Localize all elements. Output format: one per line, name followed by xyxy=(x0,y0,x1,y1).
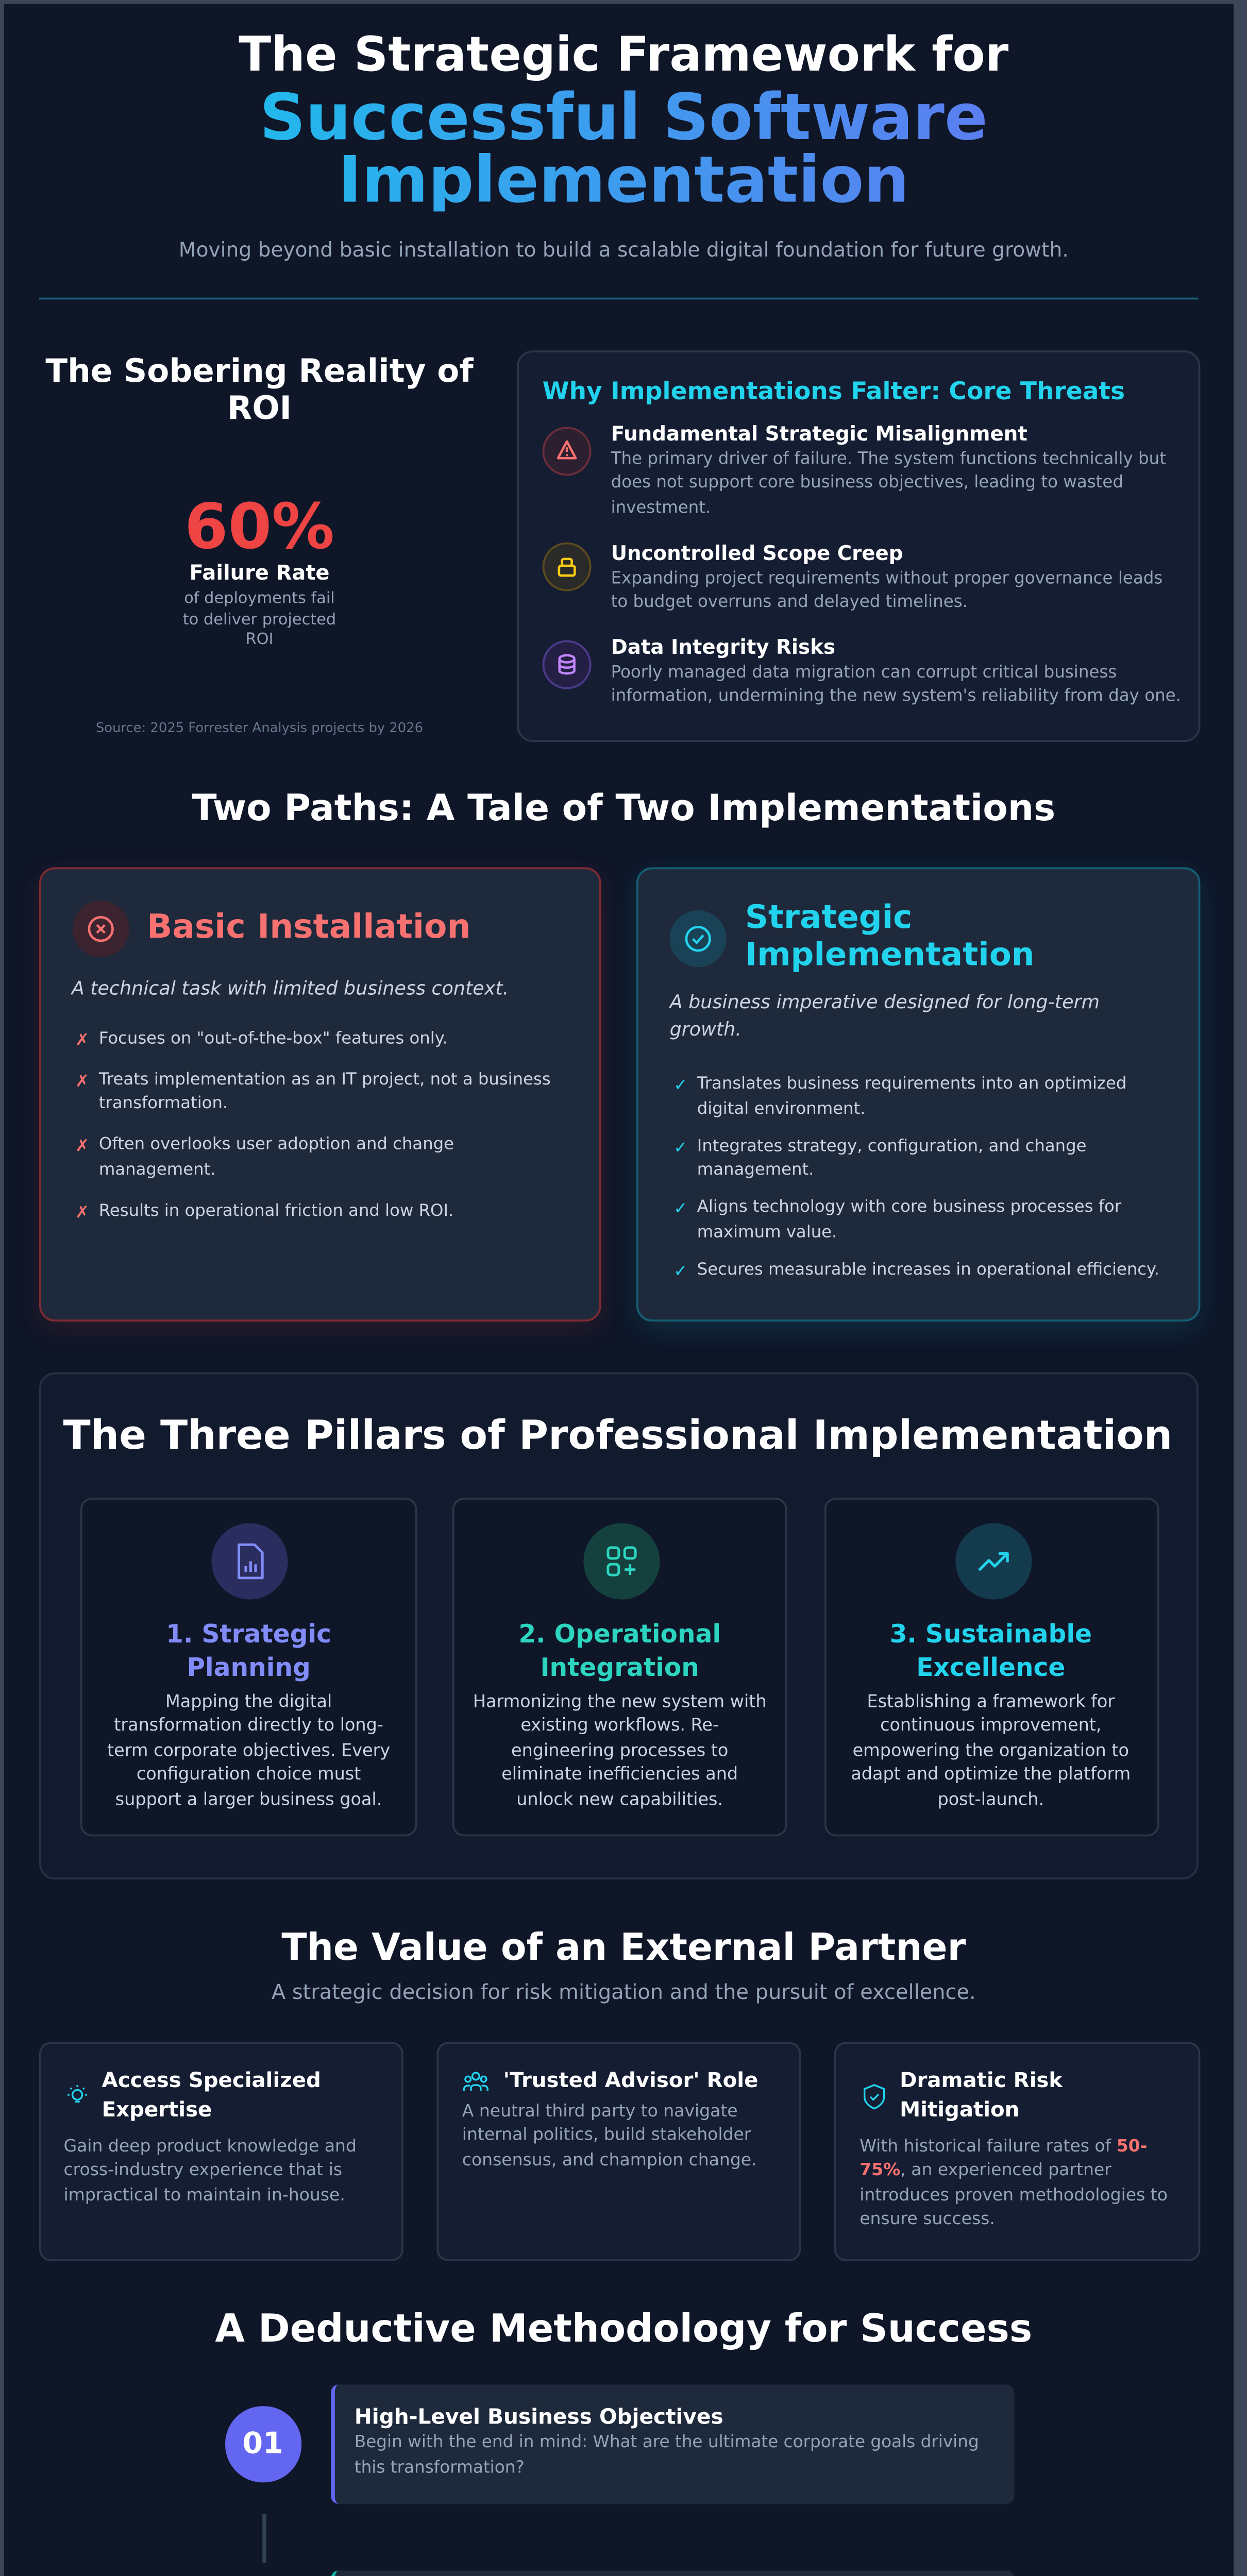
pillar 1 text: Planning xyxy=(187,1653,311,1683)
list: basic bullets xyxy=(75,1029,551,1223)
heading: core threats: Why Implementations Falter: Core Threats xyxy=(543,375,1125,404)
heading: deductive methodology: A Deductive Methodology for Success xyxy=(215,2306,1032,2351)
step 1 xyxy=(225,2384,1014,2504)
list: basic bullets: Results in operational friction and low ROI. xyxy=(99,1201,453,1221)
pillar 3 text: Excellence xyxy=(916,1653,1065,1683)
icon: apps xyxy=(582,1522,659,1599)
list: basic bullets: ✗ xyxy=(75,1138,89,1157)
heading: two paths: Two Paths: A Tale of Two Implementations xyxy=(192,789,1055,830)
stat label: Failure Rate xyxy=(189,561,330,584)
threat 3 text: Poorly managed data migration can corrupt critical business information, undermining the new system's reliability from day one. xyxy=(611,663,1181,707)
pillar 1 text xyxy=(107,1620,390,1811)
threat 2 text: Expanding project requirements without proper governance leads to budget overruns and delayed timelines. xyxy=(611,569,1162,613)
pillar 1 text: Mapping the digital transformation directly to long-term corporate objectives. Every configuration choice must support a larger business goal. xyxy=(107,1692,390,1811)
threat 1 text: The primary driver of failure. The system functions technically but does not support core business objectives, leading to wasted investment. xyxy=(611,449,1166,518)
icon: shield xyxy=(862,2082,887,2109)
text: specialized expertise: Gain deep product knowledge and cross-industry experience that is impractical to maintain in-house. xyxy=(64,2137,357,2206)
card: risk mitigation xyxy=(834,2041,1200,2260)
heading: sobering reality: The Sobering Reality of xyxy=(45,352,474,389)
heading: external partner: The Value of an External Partner xyxy=(281,1926,966,1970)
title: Implementation xyxy=(338,143,909,217)
threat 3 xyxy=(542,637,1181,707)
threat 3 text: Data Integrity Risks xyxy=(611,637,835,659)
step 2 box xyxy=(330,2570,1014,2576)
pillar 3 text: 3. Sustainable xyxy=(890,1620,1092,1650)
pillar 2 text: Harmonizing the new system with existing workflows. Re-engineering processes to eliminate inefficiencies and unlock new capabilities. xyxy=(473,1692,767,1811)
list: basic bullets: Often overlooks user adoption and change management. xyxy=(99,1136,454,1180)
text: trusted advisor: 'Trusted Advisor' Role xyxy=(503,2069,758,2092)
list: basic bullets: Focuses on "out-of-the-box" features only. xyxy=(99,1029,448,1048)
text: trusted advisor: A neutral third party to navigate internal politics, build stakeholder consensus, and champion change. xyxy=(462,2102,757,2170)
heading: sobering reality xyxy=(45,352,474,427)
step 1 box: High-Level Business Objectives xyxy=(355,2404,723,2430)
pillar 3 text xyxy=(851,1620,1131,1811)
stat description: to deliver projected xyxy=(183,610,336,628)
text: risk mitigation xyxy=(860,2066,1173,2233)
list: basic bullets: Treats implementation as an IT project, not a business transformation. xyxy=(99,1070,551,1114)
icon: trend up xyxy=(954,1522,1031,1599)
icon: warning xyxy=(543,426,592,475)
step 1 box xyxy=(330,2384,1014,2504)
threat 1 xyxy=(542,424,1166,518)
text: risk mitigation: With historical failure rates of 50-75%, an experienced partner introduces proven methodologies to ensure success. xyxy=(860,2137,1168,2230)
text: specialized expertise xyxy=(64,2069,357,2206)
list: strategic bullets: Translates business requirements into an optimized digital environment. xyxy=(697,1075,1126,1119)
pillar 2 text: Integration xyxy=(540,1653,699,1683)
threat 2 text xyxy=(611,543,1162,613)
icon: bulb xyxy=(68,2085,88,2103)
pillar 3 xyxy=(823,1497,1158,1836)
subtitle: Moving beyond basic installation to build a scalable digital foundation for future growth. xyxy=(179,239,1069,262)
panel: strategic implementation xyxy=(636,867,1200,1320)
heading: three pillars: The Three Pillars of Professional Implementation xyxy=(63,1411,1172,1458)
subheading: external partner: A strategic decision for risk mitigation and the pursuit of excellence. xyxy=(272,1981,976,2005)
card: specialized expertise xyxy=(38,2041,402,2260)
list: strategic bullets: Secures measurable increases in operational efficiency. xyxy=(697,1260,1159,1279)
pillar 1 xyxy=(80,1497,416,1836)
pillar 3 text: Establishing a framework for continuous improvement, empowering the organization to adapt and optimize the platform post-launch. xyxy=(851,1692,1131,1811)
stat description xyxy=(183,589,336,648)
panel: three pillars xyxy=(38,1371,1199,1879)
panel: core threats xyxy=(517,349,1200,741)
pillar 2 xyxy=(451,1497,787,1836)
source: Source: 2025 Forrester Analysis projects by 2026 xyxy=(96,719,423,735)
stat: 60%: 60% xyxy=(184,489,334,564)
threat 1 text: Fundamental Strategic Misalignment xyxy=(611,424,1027,445)
stat description: of deployments fail xyxy=(184,589,335,607)
title: strategic implementation: Implementation xyxy=(745,935,1034,972)
badge 01: 01 xyxy=(242,2426,283,2461)
icon: check circle xyxy=(670,909,727,966)
icon: report xyxy=(211,1522,288,1599)
list: basic bullets: ✗ xyxy=(75,1031,89,1050)
heading: sobering reality: ROI xyxy=(227,389,292,427)
title: strategic implementation: Strategic xyxy=(745,897,912,935)
icon: x circle xyxy=(72,900,128,956)
card: trusted advisor xyxy=(436,2041,800,2260)
list: strategic bullets: Aligns technology with core business processes for maximum value. xyxy=(697,1198,1121,1242)
title: Successful Software xyxy=(260,80,988,155)
step 1 box: Begin with the end in mind: What are the ultimate corporate goals driving this transformation? xyxy=(355,2433,979,2478)
subtitle italic: A technical task with limited business context. xyxy=(72,978,509,999)
subtitle italic: A business imperative designed for long-term growth. xyxy=(670,992,1100,1042)
list: basic bullets: ✗ xyxy=(75,1072,89,1091)
list: strategic bullets xyxy=(673,1075,1159,1281)
title xyxy=(239,25,1008,217)
stat description: ROI xyxy=(245,631,274,648)
pillar 1 text: 1. Strategic xyxy=(166,1620,331,1650)
list: strategic bullets: ✓ xyxy=(673,1200,687,1219)
connector lines xyxy=(261,2513,265,2562)
list: basic bullets: ✗ xyxy=(75,1203,89,1223)
text: trusted advisor xyxy=(462,2066,779,2173)
title: The Strategic Framework for xyxy=(239,25,1008,82)
step 2 xyxy=(225,2570,1014,2576)
panel: ROI xyxy=(45,352,474,735)
text: risk mitigation: Dramatic Risk Mitigation xyxy=(900,2069,1063,2121)
list: strategic bullets: ✓ xyxy=(673,1139,687,1158)
threat 2 xyxy=(542,542,1162,613)
title: basic installation: Basic Installation xyxy=(147,907,470,946)
icon: stack xyxy=(543,541,592,590)
pillar 2 text: 2. Operational xyxy=(518,1620,721,1650)
list: strategic bullets: ✓ xyxy=(673,1077,687,1096)
list: strategic bullets: ✓ xyxy=(673,1262,687,1281)
pillar 2 text xyxy=(473,1620,767,1811)
text: specialized expertise: Access Specialized Expertise xyxy=(102,2069,321,2121)
badge 01 xyxy=(225,2406,300,2481)
icon: people xyxy=(463,2072,488,2091)
threat 2 text: Uncontrolled Scope Creep xyxy=(611,543,903,565)
list: strategic bullets: Integrates strategy, configuration, and change management. xyxy=(697,1137,1087,1180)
icon: database xyxy=(543,639,592,688)
title: strategic implementation xyxy=(745,897,1034,972)
panel: basic installation xyxy=(38,867,600,1320)
threat 3 text xyxy=(611,637,1181,707)
